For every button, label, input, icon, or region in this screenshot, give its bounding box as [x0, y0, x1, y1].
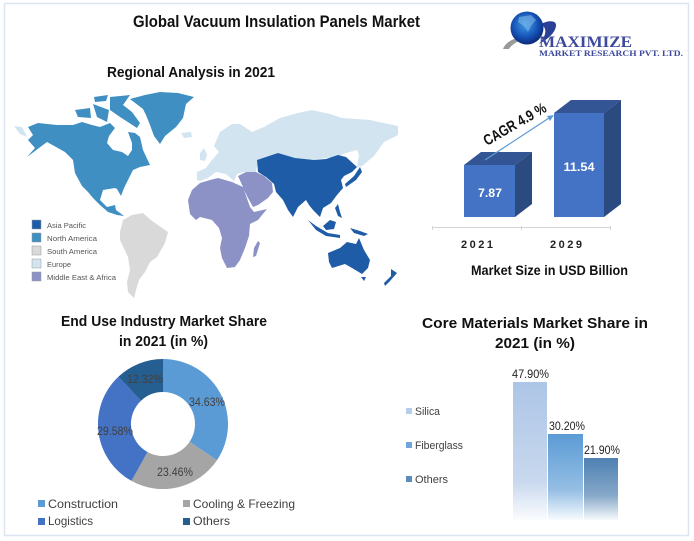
logo: Maximize Market Research: MAXIMIZE [539, 34, 632, 51]
bar: Silica: 47.90% [512, 369, 549, 381]
bar legend: Fiberglass [415, 440, 463, 452]
label: CAGR: CAGR 4.9 % [480, 100, 550, 149]
map legend: South America [47, 247, 98, 256]
slice labels [97, 372, 225, 479]
donut legend: Construction [48, 497, 118, 511]
region: Middle East and Africa [188, 172, 273, 268]
heading: core materials: Core Materials Market Share in [422, 316, 648, 332]
bar chart: market size [432, 100, 621, 251]
bar legend: Silica [415, 406, 441, 418]
slice: Logistics [98, 377, 148, 481]
bar: 2021 [464, 152, 532, 217]
bar: Fiberglass [548, 421, 585, 520]
bar: Silica [512, 369, 549, 520]
slice labels: 34.63% [189, 395, 225, 409]
donut legend: Others [193, 514, 230, 528]
donut legend: Logistics [48, 514, 93, 528]
bar: 2021: 7.87 [478, 186, 502, 200]
bar: Fiberglass: 30.20% [549, 421, 585, 433]
heading: end use: End Use Industry Market Share [61, 314, 267, 330]
heading: end use: in 2021 (in %) [119, 334, 208, 350]
map legend [32, 220, 117, 282]
bar legend: Others [415, 474, 448, 486]
slice: Others [118, 359, 163, 401]
heading: regional analysis: Regional Analysis in 2021 [107, 65, 275, 81]
slice: Cooling and Freezing [132, 442, 217, 489]
bar legend [406, 406, 463, 486]
slice labels: 23.46% [157, 465, 193, 479]
axis labels: 2029 [550, 239, 582, 251]
bar: Others: 21.90% [584, 445, 620, 457]
donut legend [38, 497, 295, 528]
logo: Maximize Market Research [503, 12, 683, 58]
axis [432, 226, 611, 230]
map legend: Asia Pacific [47, 221, 86, 230]
bar chart: core materials [512, 369, 620, 520]
caption: market size: Market Size in USD Billion [471, 263, 628, 278]
slice: Construction [163, 359, 228, 460]
region: North America [27, 92, 194, 216]
axis labels [461, 239, 582, 251]
region: Europe and Russia [14, 110, 398, 181]
heading: core materials [422, 316, 648, 352]
slice labels: 29.58% [97, 424, 133, 438]
region: Asia Pacific [257, 153, 397, 286]
heading: end use [61, 314, 267, 350]
bar: 2029 [554, 100, 621, 217]
logo: Maximize Market Research: MARKET RESEARCH PVT. LTD. [539, 48, 683, 58]
axis labels: 2021 [461, 239, 493, 251]
bar: Others [584, 445, 620, 520]
map legend: Europe [47, 260, 71, 269]
slice labels: 12.32% [127, 372, 163, 386]
bar: 2029: 11.54 [564, 160, 595, 174]
heading: core materials: 2021 (in %) [495, 336, 575, 352]
title: Global Vacuum Insulation Panels Market [133, 12, 420, 31]
donut legend: Cooling & Freezing [193, 497, 295, 511]
map legend: Middle East & Africa [47, 273, 117, 282]
map legend: North America [47, 234, 98, 243]
region: South America [120, 213, 168, 298]
donut chart [97, 359, 228, 489]
world map [14, 92, 398, 298]
arrow: CAGR [485, 115, 554, 160]
